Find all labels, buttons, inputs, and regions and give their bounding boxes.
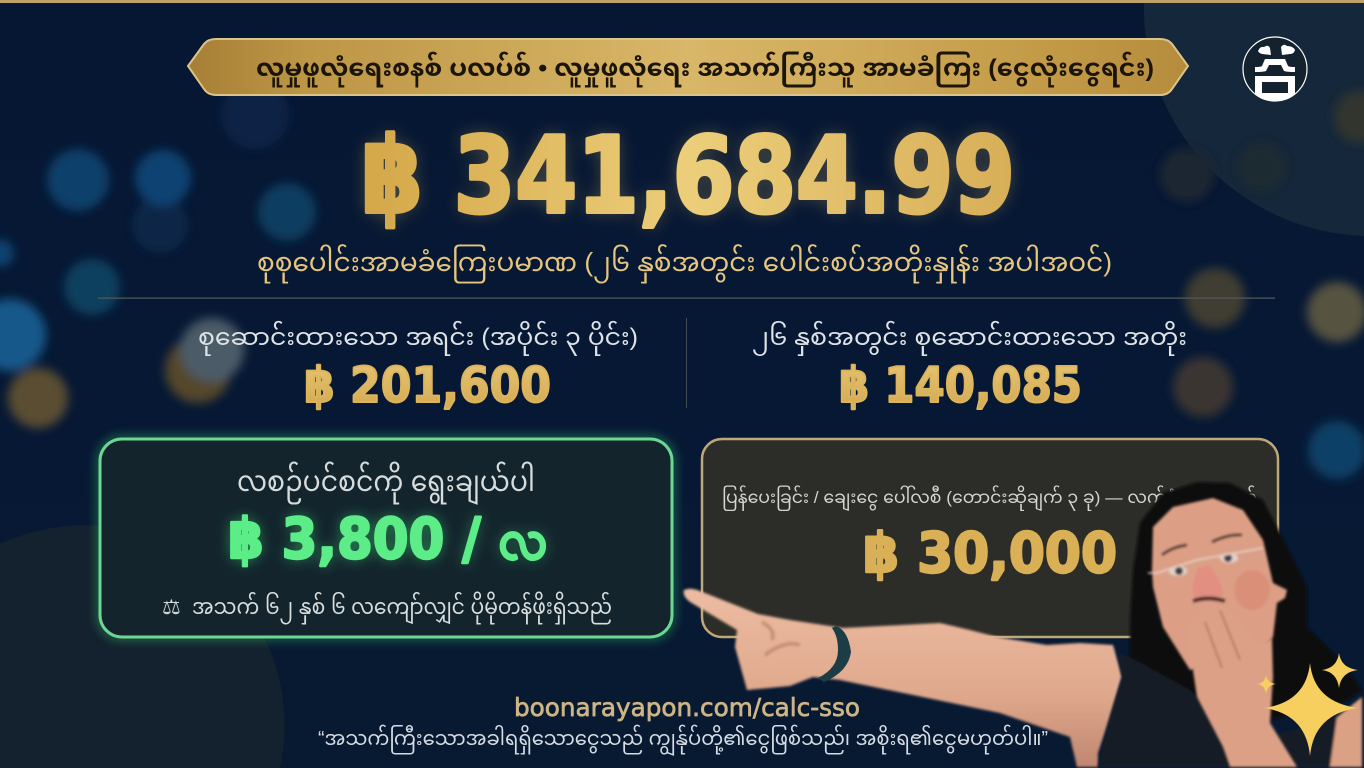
interest value: ฿ 140,085	[839, 357, 1082, 414]
pension note with scales icon	[162, 591, 612, 625]
stat: interest	[752, 321, 1187, 414]
pension amount: ฿ 3,800 / လ	[228, 507, 547, 572]
total amount: ฿ 341,684.99	[361, 115, 1015, 237]
hair and body	[1098, 482, 1362, 767]
panel: monthly pension	[100, 439, 672, 637]
principal label: စုဆောင်းထားသော အရင်း (အပိုင်း ၃ ပိုင်း)	[198, 321, 638, 356]
pension amount: ฿ 3,800 / လ	[228, 507, 547, 572]
banner title: လူမှုဖူလုံရေးစနစ် ပလပ်စ် • လူမှုဖူလုံရေး အသက်ကြီးသူ အာမခံကြး (ငွေလုံးငွေရင်း)	[256, 52, 1154, 87]
stat: principal	[198, 321, 638, 414]
pension note with scales icon: အသက် ၆၂ နှစ် ၆ လကျော်လျှင် ပိုမိုတန်ဖိုးရှိသည်	[192, 591, 612, 625]
pointing arm	[684, 589, 1122, 767]
face	[1148, 498, 1287, 670]
pension heading: လစဉ်ပင်စင်ကို ရွေးချယ်ပါ	[237, 462, 535, 505]
lump sum amount: ฿ 30,000	[863, 521, 1117, 585]
header banner	[188, 39, 1188, 95]
total amount: ฿ 341,684.99	[361, 115, 1015, 237]
bokeh lights	[0, 81, 1364, 479]
wristband	[818, 626, 851, 682]
panel: lump sum	[702, 439, 1278, 637]
lump sum label: ပြန်ပေးခြင်း / ချေးငွေ ပေါ်လစီ (တောင်းဆိုချက် ၃ ခု) — လက်ခံရရှိပါသည်	[722, 486, 1257, 512]
interest label: ၂၆ နှစ်အတွင်း စုဆောင်းထားသော အတိုး	[752, 321, 1187, 356]
principal value: ฿ 201,600	[304, 357, 551, 414]
presenter figure	[684, 482, 1362, 767]
sparkles	[1257, 653, 1358, 756]
logo	[1243, 37, 1307, 101]
footer website: boonarayapon.com/calc-sso	[514, 693, 860, 722]
dividers	[98, 298, 1275, 408]
pension note with scales icon: ⚖	[162, 595, 181, 619]
subtitle: စုစုပေါင်းအာမခံကြေးပမာဏ (၂၆ နှစ်အတွင်း ပေါင်းစပ်အတိုးနှုန်း အပါအဝင်)	[257, 245, 1112, 283]
hand over mouth	[1188, 607, 1297, 767]
footer quote: “အသက်ကြီးသောအခါရရှိသောငွေသည် ကျွန်ုပ်တို့၏ငွေဖြစ်သည်၊ အစိုးရ၏ငွေမဟုတ်ပါ။”	[318, 724, 1048, 756]
